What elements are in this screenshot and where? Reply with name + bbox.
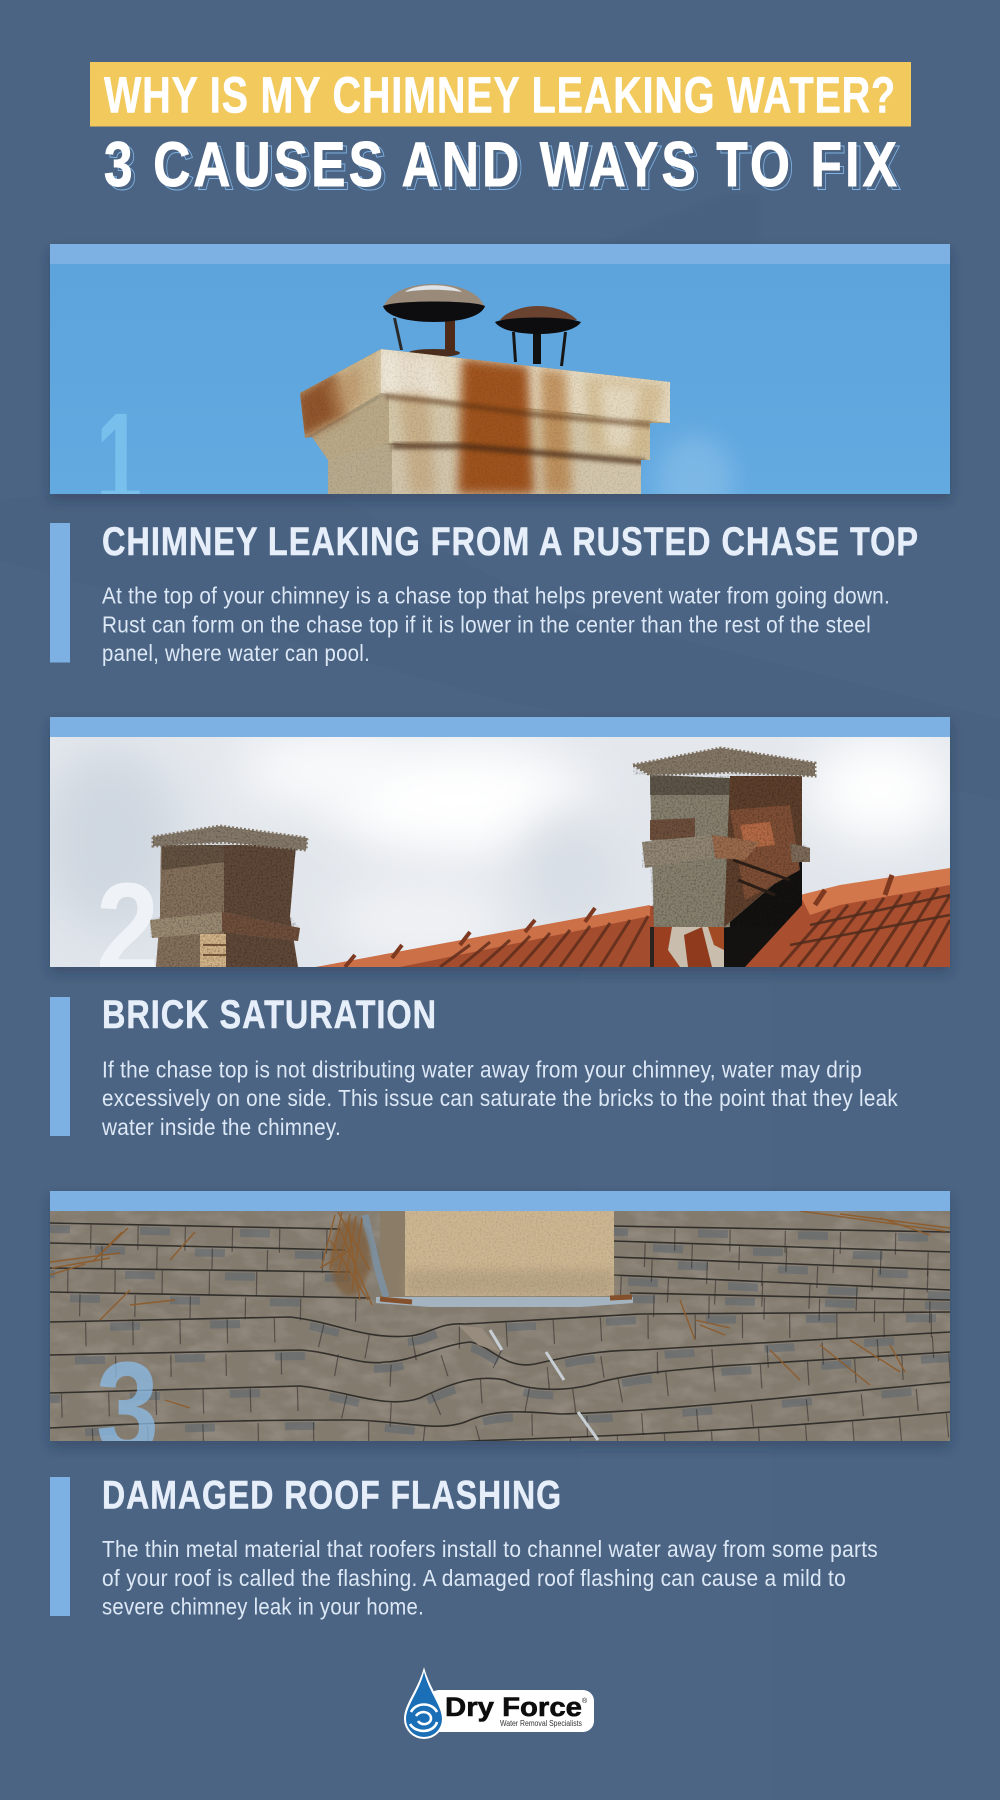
text block 3 — [50, 1474, 878, 1620]
number 2: 2 — [96, 855, 159, 1002]
heading: DAMAGED ROOF FLASHING — [102, 1474, 562, 1518]
icon: right vent cap — [495, 306, 581, 366]
logo: Dry Force — [404, 1667, 594, 1739]
buckled shingle tears — [458, 1325, 598, 1440]
body line 1: The thin metal material that roofers install to channel water away from some parts — [102, 1536, 878, 1562]
top strip — [50, 717, 950, 737]
photo: chimney against blue sky — [101, 284, 746, 494]
logo pill — [428, 1690, 594, 1732]
accent bar — [50, 997, 70, 1136]
tagline: Water Removal Specialists — [500, 1719, 582, 1728]
pine needles — [50, 1211, 950, 1408]
body line 1: If the chase top is not distributing water away from your chimney, water may drip — [102, 1056, 862, 1082]
number 1: 1 — [96, 385, 142, 532]
panel: photo 3 damaged flashing — [46, 1191, 954, 1451]
registered mark: ® — [582, 1697, 588, 1705]
top strip — [50, 244, 950, 264]
icon: water drop — [404, 1667, 444, 1739]
panel: photo 1 rusted chase top — [50, 244, 950, 532]
body line 2: of your roof is called the flashing. A damaged roof flashing can cause a mild to — [102, 1565, 846, 1591]
number 3: 3 — [96, 1334, 159, 1481]
shingle rows — [50, 1223, 968, 1461]
accent bar — [50, 523, 70, 662]
top strip — [50, 1191, 950, 1211]
body line 3: panel, where water can pool. — [102, 640, 370, 666]
body line 2: Rust can form on the chase top if it is lower in the center than the rest of the steel — [102, 612, 871, 638]
stucco chimney — [380, 1205, 614, 1300]
title highlight bar — [90, 62, 911, 126]
title — [90, 62, 911, 204]
body line 3: water inside the chimney. — [101, 1114, 341, 1140]
metal flashing — [365, 1215, 633, 1307]
right chimney — [630, 745, 815, 967]
text block 2 — [50, 993, 898, 1140]
icon: left vent cap — [383, 284, 485, 357]
photo: two brick chimneys — [50, 737, 950, 967]
wordmark: Dry Force — [445, 1692, 582, 1722]
left roof — [316, 905, 656, 967]
chimney body — [295, 345, 675, 495]
left chimney — [148, 824, 310, 969]
panel: photo 2 brick saturation — [40, 717, 950, 1002]
accent bar — [50, 1477, 70, 1616]
body line 2: excessively on one side. This issue can saturate the bricks to the point that they leak — [102, 1085, 898, 1111]
photo: shingled roof with chimney — [50, 1211, 950, 1441]
body line 3: severe chimney leak in your home. — [102, 1594, 424, 1620]
right roof — [738, 868, 950, 967]
heading: BRICK SATURATION — [102, 993, 437, 1037]
text block 1 — [50, 520, 919, 666]
body line 1: At the top of your chimney is a chase top that helps prevent water from going down. — [102, 582, 890, 608]
